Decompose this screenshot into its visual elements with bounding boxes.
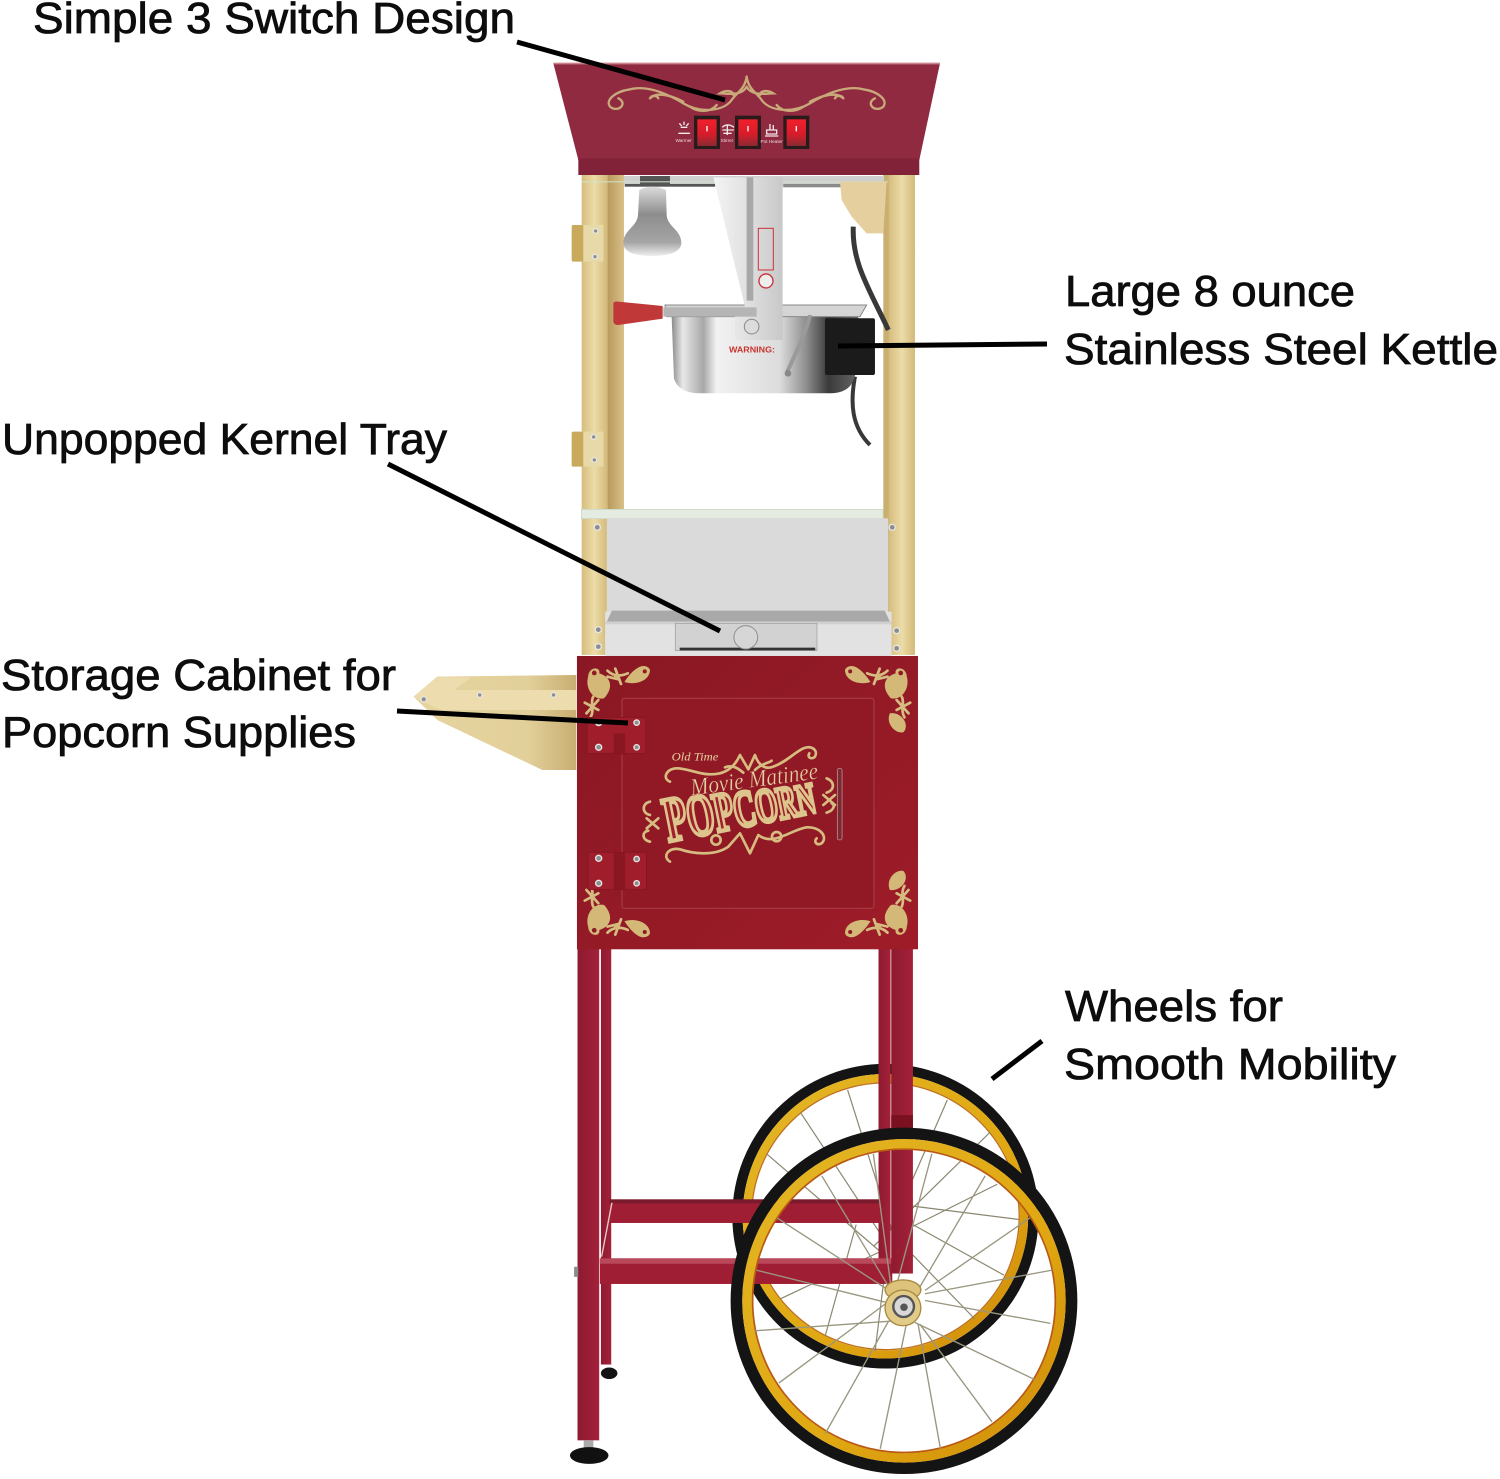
upper crossbar [602,1199,881,1257]
label: storage cabinet [1,651,396,757]
corner ornaments [585,666,910,937]
logo scrollwork [644,747,835,862]
gold bracket [840,182,887,233]
leader line: wheels [992,1041,1042,1079]
top mechanism band [582,176,888,187]
label: wheels: Wheels for [1065,982,1283,1031]
tray drawer [675,623,817,651]
label: wheels [1064,982,1396,1089]
front wheel [736,1133,1072,1468]
switch: pot heater: Pot Heater [761,139,783,144]
popcorn logo [644,747,835,862]
popcorn cart [414,63,1072,1468]
label: kettle: Large 8 ounce [1065,267,1355,316]
label: wheels: Smooth Mobility [1064,1040,1396,1089]
label: kernel tray: Unpopped Kernel Tray [2,415,447,464]
cabinet body [577,656,918,949]
tray knob [734,626,758,649]
heat lamp [623,187,681,256]
power cords [853,227,888,445]
back left leg [601,947,617,1379]
back wheel [737,1069,1033,1363]
leader line: switches [517,42,725,100]
leader line: kernel tray [388,464,720,631]
label: storage cabinet: Popcorn Supplies [2,708,356,757]
wheel hub [885,1280,921,1326]
front left leg [570,947,608,1464]
cart stand and wheels [570,947,1072,1468]
kettle [665,305,867,393]
logo: popcorn: POPCORN [657,758,821,856]
hood [553,63,940,175]
door handle [837,768,842,840]
hood ornament [609,77,885,111]
left gold post [582,175,624,655]
front right leg [891,947,913,1274]
logo: movie matinee: Movie Matinee [688,759,820,801]
kettle arm [713,177,783,340]
right gold post [883,175,915,655]
leader line: kettle [838,344,1047,346]
lower case and cabinet [577,509,918,949]
red kettle handle [613,301,757,325]
label: kettle: Stainless Steel Kettle [1064,325,1498,374]
switch: stirrer [721,116,761,149]
back right leg [879,947,891,1274]
cabinet door [622,698,874,908]
top hinge [587,717,646,755]
bottom hinge [588,852,646,890]
kernel tray [595,611,900,656]
switch: stirrer: Stirrer [721,138,734,143]
door hinges [572,225,603,467]
grey back panel [594,518,895,613]
switch: warmer [675,116,720,149]
motor box [825,318,875,375]
kettle: WARNING: [729,345,775,355]
lower crossbar [600,1258,892,1284]
upper case, posts and kettle [553,63,940,655]
switch: pot heater [761,116,809,149]
logo: old time: Old Time [672,752,718,764]
side shelf [414,675,576,770]
glass bottom edge [581,509,883,519]
label: kettle [1064,267,1498,374]
switch: warmer: Warmer [675,138,692,143]
leader line: storage cabinet [397,711,628,723]
label: storage cabinet: Storage Cabinet for [1,651,396,700]
